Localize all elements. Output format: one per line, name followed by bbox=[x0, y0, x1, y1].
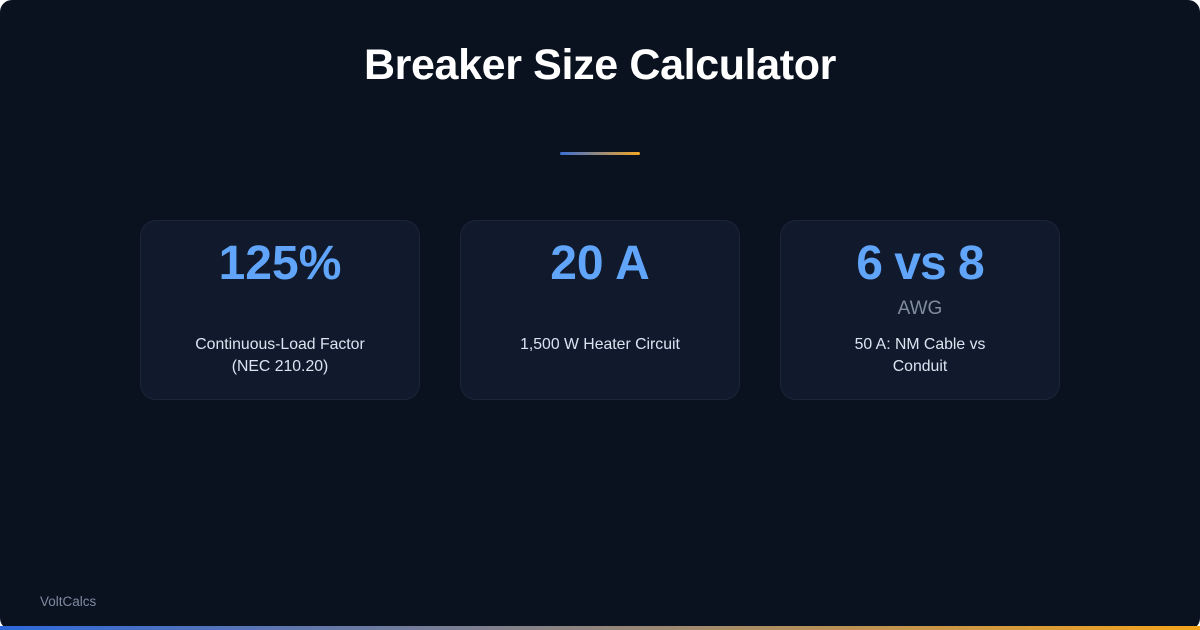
stat label: heater circuit: 1,500 W Heater Circuit bbox=[520, 336, 680, 353]
stat label: continuous-load factor bbox=[195, 336, 365, 375]
stat unit: AWG: AWG bbox=[898, 298, 942, 319]
panel: wire gauge comparison bbox=[780, 220, 1060, 400]
stat value: 20 A: 20 A bbox=[550, 237, 650, 290]
panel: heater circuit bbox=[460, 220, 740, 400]
title: Breaker Size Calculator bbox=[364, 41, 836, 89]
stat value: 6 vs 8: 6 vs 8 bbox=[856, 237, 984, 290]
brand name: VoltCalcs bbox=[40, 594, 96, 609]
stat label: NM cable vs conduit bbox=[855, 336, 985, 375]
panel: continuous-load factor bbox=[140, 220, 420, 400]
stat label: continuous-load factor: Continuous-Load Factor bbox=[195, 336, 365, 353]
bottom gradient bar bbox=[0, 626, 1200, 630]
title accent divider bbox=[560, 152, 640, 155]
stat label: continuous-load factor: (NEC 210.20) bbox=[232, 358, 328, 375]
stat label: NM cable vs conduit: 50 A: NM Cable vs bbox=[855, 336, 985, 353]
stat label: NM cable vs conduit: Conduit bbox=[893, 358, 947, 375]
stat value: 125%: 125% bbox=[219, 237, 341, 290]
